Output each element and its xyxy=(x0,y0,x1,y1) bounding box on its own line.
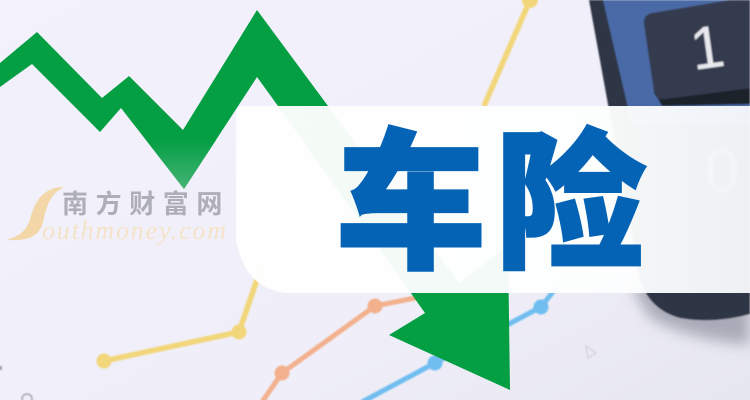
faint key digit 0: 0 xyxy=(705,137,739,206)
blue line chart xyxy=(362,288,556,400)
watermark logo xyxy=(6,187,230,245)
logo Chinese name: 南方财富网 xyxy=(62,189,230,219)
calculator shadow xyxy=(630,285,750,345)
logo swoosh S xyxy=(6,187,64,240)
green zigzag arrow xyxy=(0,10,510,390)
key digit: 1 xyxy=(686,12,729,83)
orange line chart xyxy=(262,296,425,400)
arrow valley highlight xyxy=(146,140,216,189)
icon: small paper marks xyxy=(0,346,596,400)
calculator body edge xyxy=(589,0,750,320)
key shadow xyxy=(654,88,750,106)
icon: calculator xyxy=(589,0,750,345)
title panel xyxy=(236,106,750,293)
title: 车险 xyxy=(336,120,656,288)
calculator blue face xyxy=(603,0,750,125)
calculator key 1 xyxy=(644,0,750,99)
logo URL: outhmoney.com xyxy=(42,216,228,245)
yellow line chart xyxy=(96,0,538,368)
